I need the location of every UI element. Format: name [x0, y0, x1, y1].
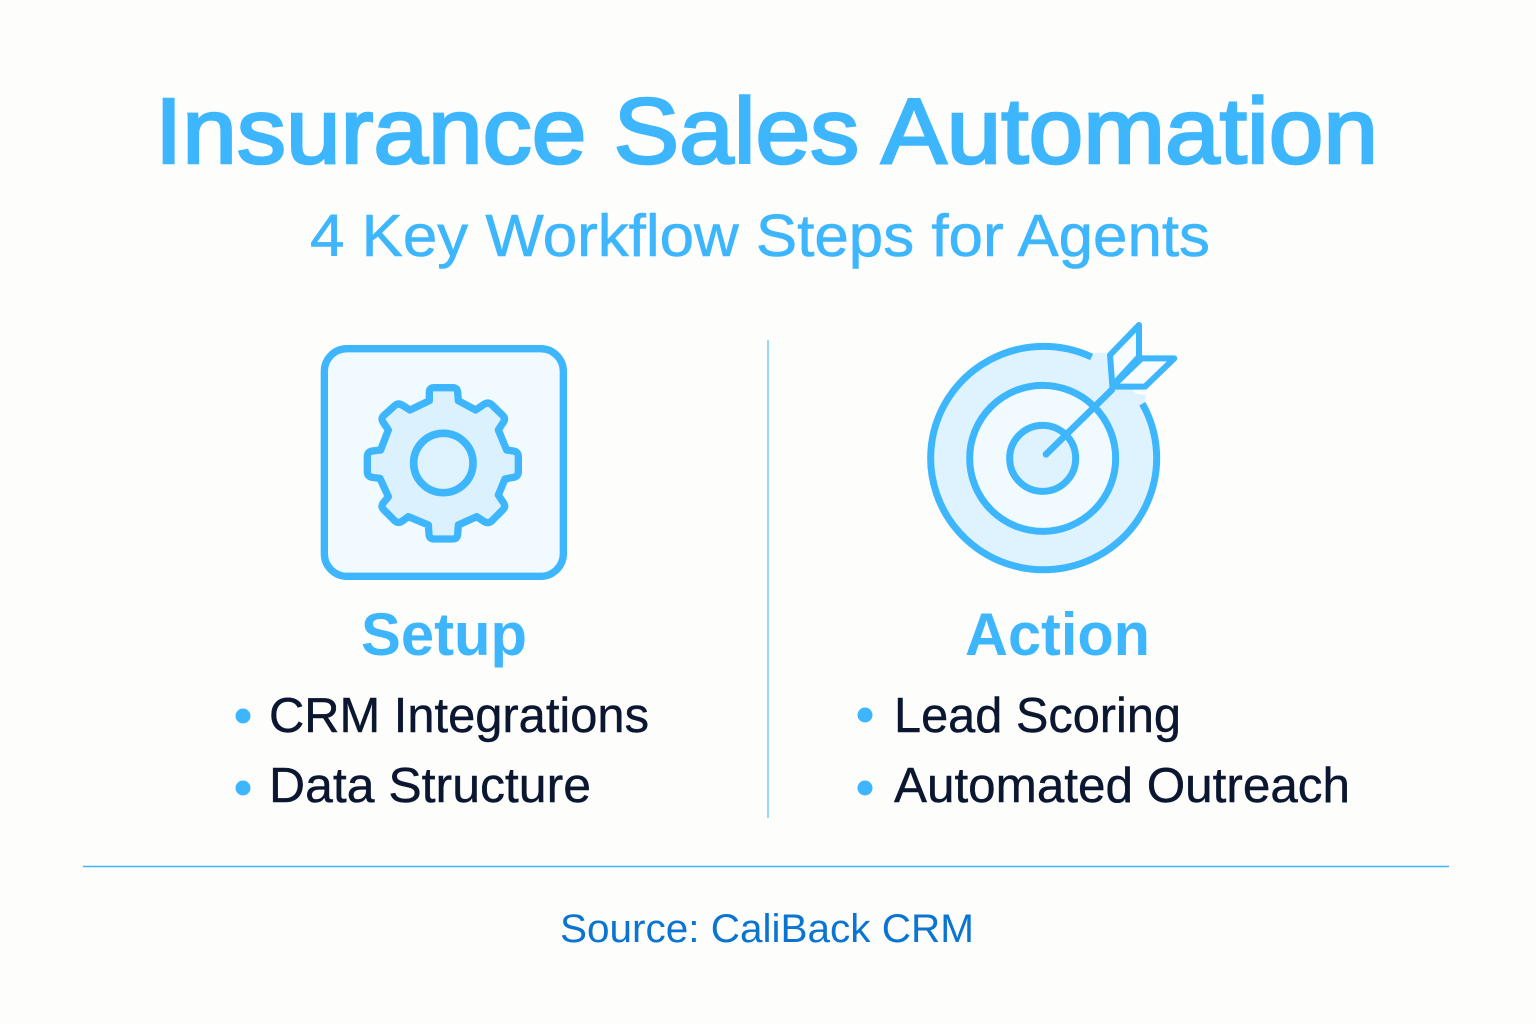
panel: setup [236, 349, 649, 813]
list: action items: Automated Outreach [894, 759, 1350, 813]
panel: action [858, 325, 1350, 813]
list: setup items [236, 689, 649, 813]
list: setup items: Data Structure [269, 759, 591, 813]
title: Insurance Sales Automation [155, 79, 1378, 183]
subtitle: 4 Key Workflow Steps for Agents [310, 203, 1210, 269]
source note: Source: CaliBack CRM [560, 907, 974, 951]
list: action items: Lead Scoring [894, 689, 1181, 743]
icon: gear in rounded square [324, 349, 563, 576]
list: action items [858, 689, 1350, 813]
heading: action: Action [965, 601, 1150, 668]
heading: setup: Setup [361, 601, 527, 668]
list: setup items: CRM Integrations [269, 689, 649, 743]
icon: target with arrow [931, 325, 1174, 570]
